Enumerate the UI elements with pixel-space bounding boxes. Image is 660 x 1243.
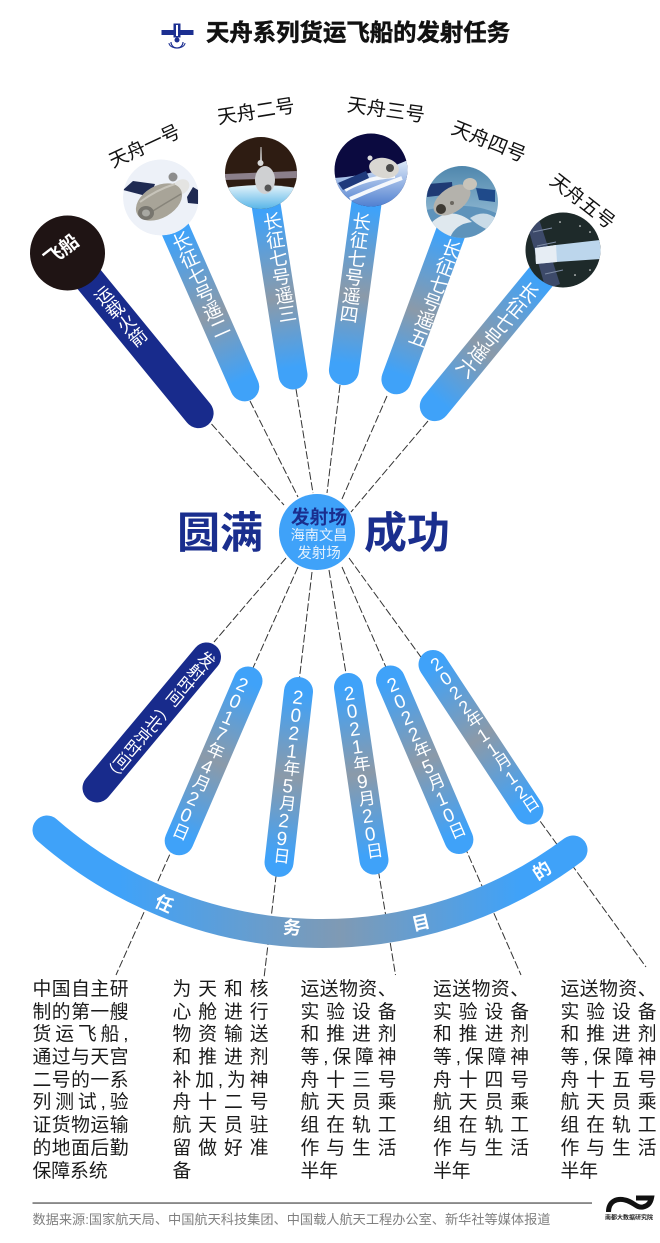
- text column: Tianzhou-4 mission: 半年: [433, 1160, 471, 1180]
- text column: Tianzhou-5 mission: 作与生活: [560, 1137, 656, 1158]
- text column: Tianzhou-2 mission: 物资输送: [172, 1023, 268, 1044]
- text column: Tianzhou-3 mission: 航天员乘: [300, 1091, 396, 1112]
- arc band: mission objectives: 的: [529, 858, 555, 884]
- date label: 2017: 2017年4月20日: [166, 672, 256, 843]
- text column: Tianzhou-5 mission: 航天员乘: [560, 1091, 656, 1112]
- icon: satellite: [162, 24, 194, 48]
- text column: Tianzhou-5 mission: 组在轨工: [560, 1114, 656, 1135]
- rocket label: 2: 长征七号遥三: [260, 210, 298, 324]
- text column: Tianzhou-2 mission: 留做好准: [172, 1137, 268, 1158]
- date label: 2021-9: 2021年9月20日: [338, 682, 384, 861]
- text column: Tianzhou-1 mission: 证货物运输: [32, 1114, 128, 1135]
- date bar: 2021-5: [263, 675, 315, 878]
- text column: Tianzhou-5 mission: 实验设备: [560, 1001, 656, 1022]
- center circle: launch site: 海南文昌: [291, 528, 347, 544]
- text column: Tianzhou-1 mission: [32, 978, 128, 1180]
- dashed connectors: bottom: [116, 558, 646, 978]
- circle: spacecraft header: [30, 216, 105, 290]
- text column: Tianzhou-2 mission: 补加,为神: [172, 1069, 268, 1090]
- text column: Tianzhou-2 mission: 和推进剂: [172, 1046, 268, 1067]
- text column: Tianzhou-2 mission: 航天员驻: [172, 1114, 268, 1135]
- text column: Tianzhou-2 mission: [172, 978, 268, 1180]
- text column: Tianzhou-1 mission: 的地面后勤: [32, 1137, 128, 1158]
- center circle: launch site: 发射场: [291, 506, 347, 528]
- text column: Tianzhou-1 mission: 中国自主研: [32, 978, 128, 999]
- text column: Tianzhou-3 mission: 实验设备: [300, 1001, 396, 1022]
- circle: spacecraft header: 飞船: [40, 230, 83, 271]
- bar: Tianzhou-4 rocket: [377, 197, 476, 399]
- date bar: 2022-11: [413, 644, 549, 830]
- text column: Tianzhou-2 mission: 心舱进行: [172, 1001, 268, 1022]
- text column: Tianzhou-4 mission: [433, 978, 529, 1180]
- rocket label: header: 运载火箭: [89, 283, 150, 351]
- text column: Tianzhou-5 mission: 舟十五号: [560, 1069, 656, 1090]
- date bar: 2021-9: [332, 671, 390, 876]
- arc band: mission objectives: 务: [282, 917, 302, 939]
- center circle: launch site: 发射场: [297, 545, 341, 562]
- text column: Tianzhou-4 mission: 等,保障神: [433, 1046, 529, 1067]
- text column: Tianzhou-4 mission: 航天员乘: [433, 1091, 529, 1112]
- text column: Tianzhou-3 mission: 舟十三号: [300, 1069, 396, 1090]
- text column: Tianzhou-4 mission: 和推进剂: [433, 1023, 529, 1044]
- icon: Tianzhou-5 photo: [525, 212, 601, 290]
- text column: Tianzhou-4 mission: 运送物资、: [433, 978, 529, 999]
- logo: [605, 1198, 653, 1222]
- source note: 数据来源:国家航天局、中国航天科技集团、中国载人航天工程办公室、新华社等媒体报道: [32, 1211, 550, 1227]
- dashed connectors: top: [212, 385, 428, 512]
- text column: Tianzhou-3 mission: 运送物资、: [300, 978, 396, 999]
- rocket label: 1: 长征七号遥二: [166, 228, 232, 342]
- bar: Tianzhou-1 rocket: [148, 191, 264, 406]
- text column: Tianzhou-1 mission: 通过与天宫: [32, 1046, 128, 1067]
- arc band: mission objectives: 任: [152, 891, 176, 917]
- text column: Tianzhou-1 mission: 保障系统: [32, 1160, 108, 1180]
- arc band: mission objectives: 目: [410, 911, 432, 935]
- text column: Tianzhou-4 mission: 实验设备: [433, 1001, 529, 1022]
- text column: Tianzhou-4 mission: 舟十四号: [433, 1069, 529, 1090]
- bar: Tianzhou-2 rocket: [247, 171, 310, 392]
- rocket label: 3: 长征七号遥四: [337, 211, 372, 325]
- text column: Tianzhou-5 mission: 半年: [560, 1160, 598, 1180]
- label: Tianzhou-1: 天舟一号: [106, 121, 184, 173]
- label: Tianzhou-4: 天舟四号: [448, 117, 529, 167]
- text column: Tianzhou-4 mission: 作与生活: [433, 1137, 529, 1158]
- text column: Tianzhou-3 mission: 作与生活: [300, 1137, 396, 1158]
- rocket label: 4: 长征七号遥五: [404, 235, 463, 350]
- text column: Tianzhou-3 mission: [300, 978, 396, 1180]
- text column: Tianzhou-5 mission: 等,保障神: [560, 1046, 656, 1067]
- date bar: header: [77, 637, 227, 808]
- text column: Tianzhou-2 mission: 为天和核: [172, 978, 268, 999]
- date bar: 2022-5: [371, 661, 478, 859]
- arc band: mission objectives: [47, 830, 573, 939]
- date bar: 2017: [160, 662, 267, 860]
- bar: rocket header: [56, 243, 220, 434]
- text column: Tianzhou-3 mission: 组在轨工: [300, 1114, 396, 1135]
- heading: 圆满: 圆满: [177, 510, 263, 558]
- text column: Tianzhou-1 mission: 货运飞船,: [32, 1023, 128, 1044]
- label: Tianzhou-2: 天舟二号: [216, 95, 296, 129]
- text column: Tianzhou-3 mission: 半年: [300, 1160, 338, 1180]
- title: 天舟系列货运飞船的发射任务: [206, 20, 510, 46]
- text column: Tianzhou-5 mission: 和推进剂: [560, 1023, 656, 1044]
- text column: Tianzhou-2 mission: 备: [172, 1160, 191, 1180]
- text column: Tianzhou-1 mission: 列测试,验: [32, 1091, 128, 1112]
- text column: Tianzhou-5 mission: [560, 978, 656, 1180]
- bar: Tianzhou-5 rocket: [414, 240, 575, 427]
- bar: Tianzhou-3 rocket: [327, 168, 386, 387]
- icon: Tianzhou-1 photo: [123, 160, 199, 236]
- label: Tianzhou-5: 天舟五号: [546, 170, 619, 234]
- footer rule: [32, 1202, 592, 1204]
- text column: Tianzhou-2 mission: 舟十二号: [172, 1091, 268, 1112]
- text column: Tianzhou-1 mission: 制的第一艘: [32, 1001, 128, 1022]
- date label: header: 发射时间（北京时间）: [98, 646, 219, 785]
- icon: Tianzhou-2 photo: [225, 137, 297, 209]
- text column: Tianzhou-1 mission: 二号的一系: [32, 1069, 128, 1090]
- date label: 2021-5: 2021年5月29日: [269, 687, 309, 865]
- center circle: launch site: [279, 494, 355, 570]
- heading: 成功: 成功: [364, 510, 450, 558]
- text column: Tianzhou-3 mission: 和推进剂: [300, 1023, 396, 1044]
- date label: 2022-5: 2022年5月10日: [379, 672, 468, 843]
- text column: Tianzhou-5 mission: 运送物资、: [560, 978, 656, 999]
- icon: Tianzhou-4 photo: [426, 166, 498, 238]
- rocket label: 5: 长征七号遥六: [450, 276, 542, 381]
- icon: Tianzhou-3 photo: [334, 133, 408, 207]
- text column: Tianzhou-3 mission: 等,保障神: [300, 1046, 396, 1067]
- logo: 南都大数据研究院: [605, 1214, 653, 1222]
- label: Tianzhou-3: 天舟三号: [346, 94, 426, 127]
- text column: Tianzhou-4 mission: 组在轨工: [433, 1114, 529, 1135]
- date label: 2022-11: 2022年11月12日: [423, 650, 542, 817]
